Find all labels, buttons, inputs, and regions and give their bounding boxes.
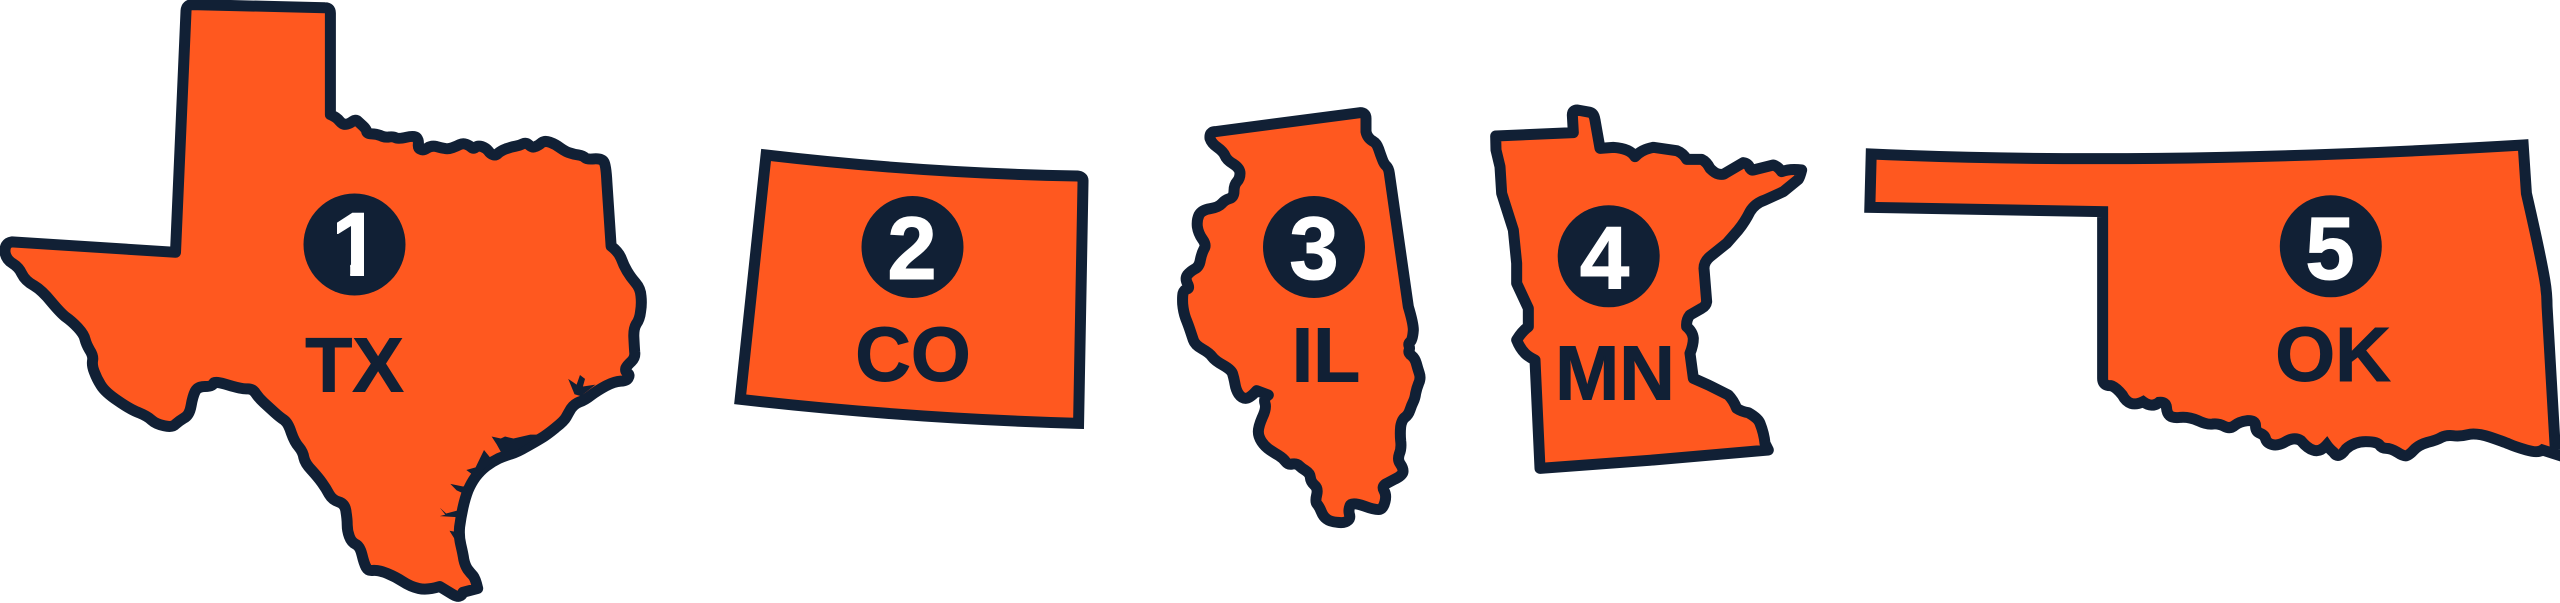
state label: CO: CO	[855, 312, 971, 398]
state: Illinois, rank 3	[1183, 113, 1420, 523]
rank badge: 1: 1	[331, 194, 381, 294]
shape: Illinois outline	[1183, 113, 1420, 523]
shape: Minnesota outline	[1496, 110, 1802, 468]
rank badge: 5	[2280, 195, 2382, 298]
shape: Colorado outline	[740, 155, 1083, 423]
state: Oklahoma, rank 5	[1870, 145, 2560, 457]
state label: IL: IL	[1292, 312, 1360, 398]
state: Minnesota, rank 4	[1496, 110, 1802, 468]
rank badge: 4	[1558, 205, 1660, 307]
rank badge: 4: 4	[1580, 207, 1630, 307]
state label: OK: OK	[2275, 312, 2391, 398]
state label: MN: MN	[1555, 330, 1675, 416]
rank badge: 3	[1263, 196, 1365, 298]
shape: Texas outline	[5, 5, 641, 596]
state label: TX: TX	[305, 322, 404, 408]
shape: Oklahoma outline	[1870, 145, 2560, 457]
rank badge: 3: 3	[1289, 198, 1339, 298]
rank badge: 2: 2	[887, 198, 937, 298]
state: Colorado, rank 2	[740, 155, 1083, 423]
state: Texas, rank 1	[5, 5, 641, 596]
rank badge: 2	[862, 196, 964, 298]
rank badge: 1	[304, 194, 406, 296]
rank badge: 5: 5	[2305, 198, 2355, 298]
